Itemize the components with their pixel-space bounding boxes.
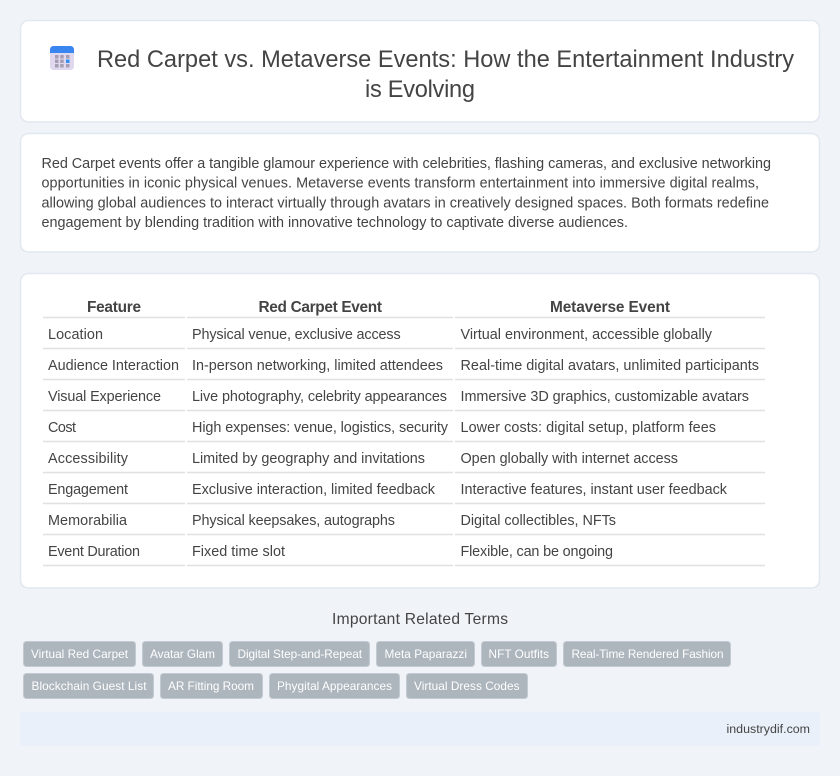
tag: Virtual Red Carpet — [24, 642, 136, 666]
table header row — [43, 299, 765, 318]
tag: Blockchain Guest List: Blockchain Guest List — [32, 679, 147, 693]
tag: Avatar Glam — [142, 642, 222, 666]
tag: Meta Paparazzi — [376, 642, 474, 666]
row: Cost: High expenses: venue, logistics, security — [192, 420, 449, 436]
table header row: Red Carpet Event — [258, 299, 382, 316]
row: Memorabilia: Digital collectibles, NFTs — [460, 513, 616, 529]
tag: NFT Outfits: NFT Outfits — [488, 647, 549, 661]
tag: Digital Step-and-Repeat — [230, 642, 370, 666]
row: Accessibility: Limited by geography and invitations — [192, 451, 425, 467]
intro paragraph — [42, 156, 771, 231]
row: Audience Interaction — [43, 358, 765, 380]
row: Cost: Cost — [48, 420, 76, 436]
row: Location — [43, 327, 765, 348]
tag: Avatar Glam: Avatar Glam — [150, 647, 215, 661]
intro paragraph: opportunities in iconic physical venues. Metaverse events transform entertainment into immersive digital realms, — [42, 176, 759, 192]
row: Engagement — [43, 482, 765, 504]
table header row: Metaverse Event — [550, 299, 670, 316]
intro paragraph: allowing global audiences to interact virtually through avatars in creatively designed spaces. Both formats redefine — [42, 196, 769, 212]
row: Memorabilia — [43, 513, 765, 534]
row: Memorabilia: Memorabilia — [48, 513, 127, 529]
heading: important related terms: Important Related Terms — [332, 611, 508, 628]
row: Memorabilia: Physical keepsakes, autographs — [192, 513, 395, 529]
tag: Digital Step-and-Repeat: Digital Step-and-Repeat — [238, 647, 363, 661]
panel: introduction — [20, 134, 820, 252]
row: Event Duration: Fixed time slot — [192, 544, 285, 560]
row: Event Duration — [43, 544, 765, 566]
row: Engagement: Exclusive interaction, limited feedback — [192, 482, 436, 498]
tag: Blockchain Guest List — [24, 674, 154, 698]
intro paragraph: engagement by blending tradition with innovative technology to captivate diverse audiences. — [42, 215, 628, 231]
row: Cost: Lower costs: digital setup, platform fees — [460, 420, 716, 436]
row: Accessibility — [43, 451, 765, 472]
row: Event Duration: Flexible, can be ongoing — [460, 544, 613, 560]
row: Engagement: Engagement — [48, 482, 128, 498]
row: Visual Experience — [43, 389, 765, 410]
row: Accessibility: Accessibility — [48, 451, 129, 467]
panel: title card — [20, 20, 820, 122]
tag: Phygital Appearances — [270, 674, 400, 698]
row: Audience Interaction: Audience Interaction — [48, 358, 179, 374]
row: Accessibility: Open globally with internet access — [460, 451, 678, 467]
row: Engagement: Interactive features, instant user feedback — [460, 482, 728, 498]
tag: Meta Paparazzi: Meta Paparazzi — [384, 647, 467, 661]
tag: Real-Time Rendered Fashion: Real-Time Rendered Fashion — [572, 647, 724, 661]
intro paragraph: Red Carpet events offer a tangible glamour experience with celebrities, flashing cameras, and exclusive networking — [42, 156, 771, 172]
tag: Real-Time Rendered Fashion — [564, 642, 730, 666]
row: Visual Experience: Visual Experience — [48, 389, 161, 405]
tag: Phygital Appearances: Phygital Appearances — [277, 679, 392, 693]
icon: calendar — [50, 46, 74, 70]
row: Visual Experience: Immersive 3D graphics, customizable avatars — [460, 389, 749, 405]
row: Audience Interaction: In-person networking, limited attendees — [192, 358, 443, 374]
tag: AR Fitting Room — [160, 674, 262, 698]
tag: Virtual Dress Codes: Virtual Dress Codes — [414, 679, 520, 693]
row: Visual Experience: Live photography, celebrity appearances — [192, 389, 447, 405]
row: Location: Location — [48, 327, 103, 343]
title: is Evolving — [365, 77, 475, 103]
table header row: Feature — [87, 299, 141, 316]
tag group: related terms — [24, 642, 730, 698]
row: Location: Physical venue, exclusive access — [192, 327, 401, 343]
row: Event Duration: Event Duration — [48, 544, 140, 560]
row: Cost — [43, 420, 765, 442]
title — [97, 47, 794, 103]
title: Red Carpet vs. Metaverse Events: How the Entertainment Industry — [97, 47, 794, 73]
tag: NFT Outfits — [482, 642, 556, 666]
panel: comparison table — [20, 274, 820, 588]
row: Audience Interaction: Real-time digital avatars, unlimited participants — [460, 358, 759, 374]
tag: Virtual Dress Codes — [406, 674, 528, 698]
tag: Virtual Red Carpet: Virtual Red Carpet — [31, 647, 129, 661]
tag: AR Fitting Room: AR Fitting Room — [168, 679, 254, 693]
footer bar: industrydif.com — [726, 722, 810, 736]
footer bar — [20, 712, 820, 746]
row: Location: Virtual environment, accessible globally — [460, 327, 713, 343]
